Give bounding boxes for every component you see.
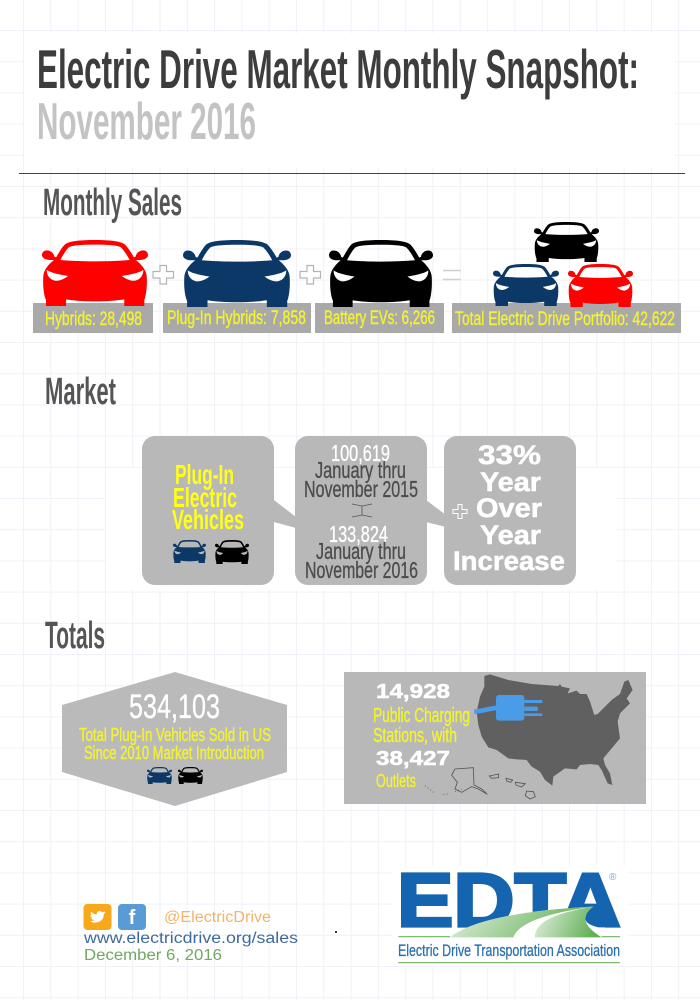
map: united states xyxy=(477,674,633,786)
heading: market: Market xyxy=(45,371,116,413)
logo: EDTA: ® xyxy=(609,872,617,883)
panel: public charging stations: Public Charging xyxy=(373,705,470,727)
icon: comparison arrow xyxy=(352,504,372,517)
label: hybrids: Hybrids: 28,498 xyxy=(45,309,142,330)
title: November 2016 xyxy=(37,93,256,151)
panel: public charging stations: Outlets xyxy=(376,771,416,791)
icon: facebook: f xyxy=(129,907,136,929)
logo: EDTA: Electric Drive Transportation Association xyxy=(398,941,620,960)
panel: public charging stations xyxy=(344,672,646,804)
panel: year to date comparison: November 2016 xyxy=(305,557,418,583)
panel: monthly sales row xyxy=(33,222,681,333)
panel: total plug-in vehicles sold: Since 2010 Market Introduction xyxy=(84,743,264,763)
title xyxy=(37,38,639,151)
label: plug-in hybrids: Plug-In Hybrids: 7,858 xyxy=(167,308,306,329)
label: total portfolio xyxy=(452,303,681,333)
connector xyxy=(422,497,446,527)
label: hybrids xyxy=(33,303,153,333)
icon: twitter xyxy=(84,904,112,930)
logo: EDTA xyxy=(392,858,628,966)
panel: total plug-in vehicles sold xyxy=(62,672,287,806)
panel: year over year increase xyxy=(444,436,576,585)
text: website: www.electricdrive.org/sales xyxy=(83,930,298,947)
icon: red car xyxy=(42,240,148,306)
icon: small blue car xyxy=(493,264,559,306)
panel: year over year increase: 33% xyxy=(478,440,541,470)
text: date: December 6, 2016 xyxy=(84,947,222,964)
panel: plug-in electric vehicles: Vehicles xyxy=(172,504,244,535)
heading: monthly sales: Monthly Sales xyxy=(43,182,182,224)
icon: plus xyxy=(153,266,174,284)
icon: plug xyxy=(474,695,542,721)
label: plug-in hybrids xyxy=(163,303,311,333)
panel: plug-in electric vehicles: Electric xyxy=(173,482,237,513)
icon: small black car xyxy=(534,222,599,262)
panel: year to date comparison: 100,619 xyxy=(331,440,390,466)
panel: year over year increase: Over xyxy=(476,493,543,523)
panel: total plug-in vehicles sold: 534,103 xyxy=(129,688,220,726)
icon: plus xyxy=(300,266,320,284)
panel: year to date comparison: January thru xyxy=(315,457,406,483)
heading: totals: Totals xyxy=(45,615,105,657)
panel: plug-in electric vehicles xyxy=(142,436,274,585)
icon: small red car xyxy=(568,264,633,307)
label: battery EVs: Battery EVs: 6,266 xyxy=(324,308,435,329)
panel: year to date comparison xyxy=(295,436,427,585)
panel: public charging stations: Stations, with xyxy=(373,725,457,747)
icon: black car xyxy=(329,240,433,307)
icon: equals xyxy=(443,270,461,280)
panel: year over year increase: Year xyxy=(480,467,542,497)
icon: blue car xyxy=(183,240,291,307)
panel: year over year increase: Year xyxy=(480,520,542,550)
panel: year to date comparison: November 2015 xyxy=(304,476,418,502)
label: battery EVs xyxy=(315,303,444,333)
logo: EDTA: EDTA xyxy=(397,858,621,944)
connector xyxy=(270,497,296,528)
panel: plug-in electric vehicles: Plug-In xyxy=(175,459,234,490)
panel: year to date comparison: 133,824 xyxy=(329,521,388,547)
text: twitter handle: @ElectricDrive xyxy=(164,909,271,926)
icon: facebook xyxy=(118,904,146,930)
panel: public charging stations: 38,427 xyxy=(376,748,450,770)
panel: total plug-in vehicles sold: Total Plug-In Vehicles Sold in US xyxy=(79,725,271,745)
road swoosh xyxy=(398,905,621,963)
panel: year to date comparison: January thru xyxy=(316,538,406,564)
panel: year over year increase: Increase xyxy=(453,546,565,576)
map: alaska and hawaii xyxy=(425,768,535,799)
panel: market xyxy=(142,436,576,585)
panel: public charging stations: 14,928 xyxy=(376,681,450,703)
